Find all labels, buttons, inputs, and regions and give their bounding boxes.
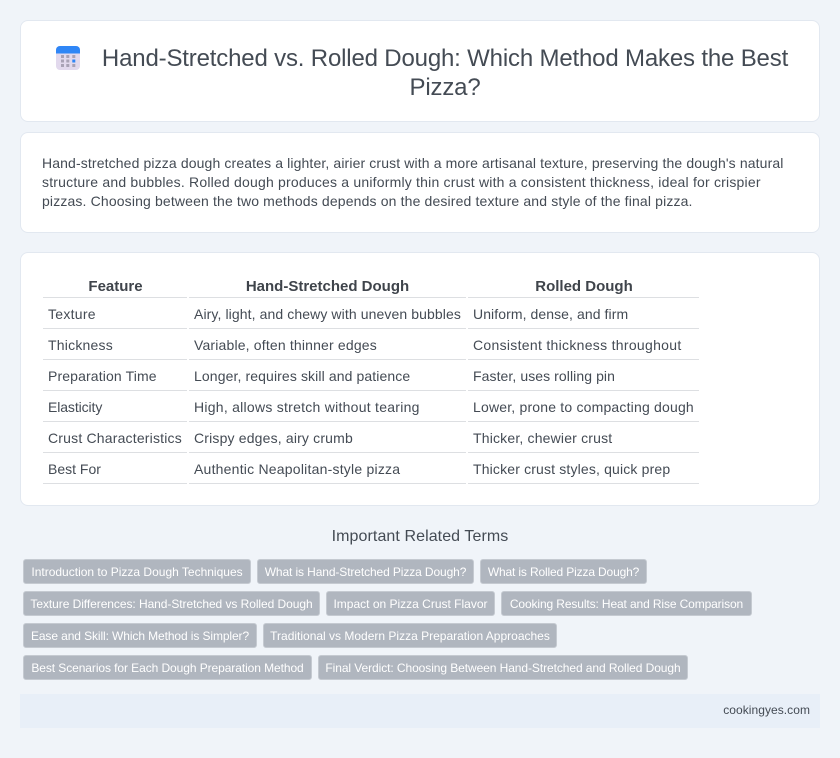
row: elasticity: Elasticity xyxy=(48,399,102,415)
tag xyxy=(23,591,320,616)
tag xyxy=(23,559,251,584)
comparison table panel: Uniform, dense, and firm xyxy=(473,306,628,322)
row: thickness: Thickness xyxy=(48,337,113,353)
comparison table panel: High, allows stretch without tearing xyxy=(194,399,420,415)
tag: Impact on Pizza Crust Flavor xyxy=(333,597,488,611)
footer bar xyxy=(20,694,820,728)
footer source: cookingyes.com xyxy=(723,703,810,717)
comparison table panel: Consistent thickness throughout xyxy=(473,337,682,353)
comparison table panel: Faster, uses rolling pin xyxy=(473,368,615,384)
comparison table panel: Airy, light, and chewy with uneven bubbles xyxy=(194,306,461,322)
tag: What is Rolled Pizza Dough? xyxy=(488,565,639,579)
comparison table panel: Longer, requires skill and patience xyxy=(194,368,410,384)
intro text: structure and bubbles. Rolled dough produces a uniformly thin crust with a consistent thickness, ideal for crispier xyxy=(42,174,761,190)
row: crust characteristics: Crust Characteristics xyxy=(48,430,182,446)
intro text: pizzas. Choosing between the two methods depends on the desired texture and style of the final pizza. xyxy=(42,193,693,209)
header card xyxy=(20,20,820,122)
tag: Traditional vs Modern Pizza Preparation Approaches xyxy=(270,629,550,643)
related terms heading: Important Related Terms xyxy=(332,528,508,545)
tag: Best Scenarios for Each Dough Preparation Method xyxy=(31,661,304,675)
tag xyxy=(326,591,495,616)
tag: Final Verdict: Choosing Between Hand-Stretched and Rolled Dough xyxy=(325,661,681,675)
icon: calendar xyxy=(56,46,80,70)
comparison table panel: Thicker crust styles, quick prep xyxy=(473,461,670,477)
tag xyxy=(318,655,688,680)
tag list xyxy=(23,559,752,680)
row: texture: Texture xyxy=(48,306,96,322)
comparison table panel: Thicker, chewier crust xyxy=(473,430,612,446)
comparison table panel: Lower, prone to compacting dough xyxy=(473,399,694,415)
comparison table panel: Variable, often thinner edges xyxy=(194,337,377,353)
table header: hand-stretched: Hand-Stretched Dough xyxy=(246,278,409,295)
comparison table panel: Crispy edges, airy crumb xyxy=(194,430,353,446)
comparison table panel: Authentic Neapolitan-style pizza xyxy=(194,461,400,477)
tag xyxy=(501,591,752,616)
tag: Texture Differences: Hand-Stretched vs Rolled Dough xyxy=(30,597,313,611)
title: Hand-Stretched vs. Rolled Dough: Which Method Makes the Best Pizza? xyxy=(102,45,788,101)
table header: rolled: Rolled Dough xyxy=(535,278,633,295)
tag: Ease and Skill: Which Method is Simpler? xyxy=(31,629,249,643)
intro text: Hand-stretched pizza dough creates a lighter, airier crust with a more artisanal texture, preserving the dough's natural xyxy=(42,155,784,171)
comparison table panel xyxy=(20,252,820,506)
intro text xyxy=(42,155,784,209)
tag xyxy=(480,559,647,584)
intro text panel xyxy=(20,132,820,233)
tag: Cooking Results: Heat and Rise Comparison xyxy=(510,597,743,611)
tag xyxy=(263,623,557,648)
row: best for: Best For xyxy=(48,461,101,477)
tag xyxy=(23,655,312,680)
tag xyxy=(257,559,474,584)
tag: What is Hand-Stretched Pizza Dough? xyxy=(265,565,466,579)
row: preparation time: Preparation Time xyxy=(48,368,157,384)
table header: feature: Feature xyxy=(88,278,143,295)
tag xyxy=(23,623,257,648)
tag: Introduction to Pizza Dough Techniques xyxy=(31,565,243,579)
